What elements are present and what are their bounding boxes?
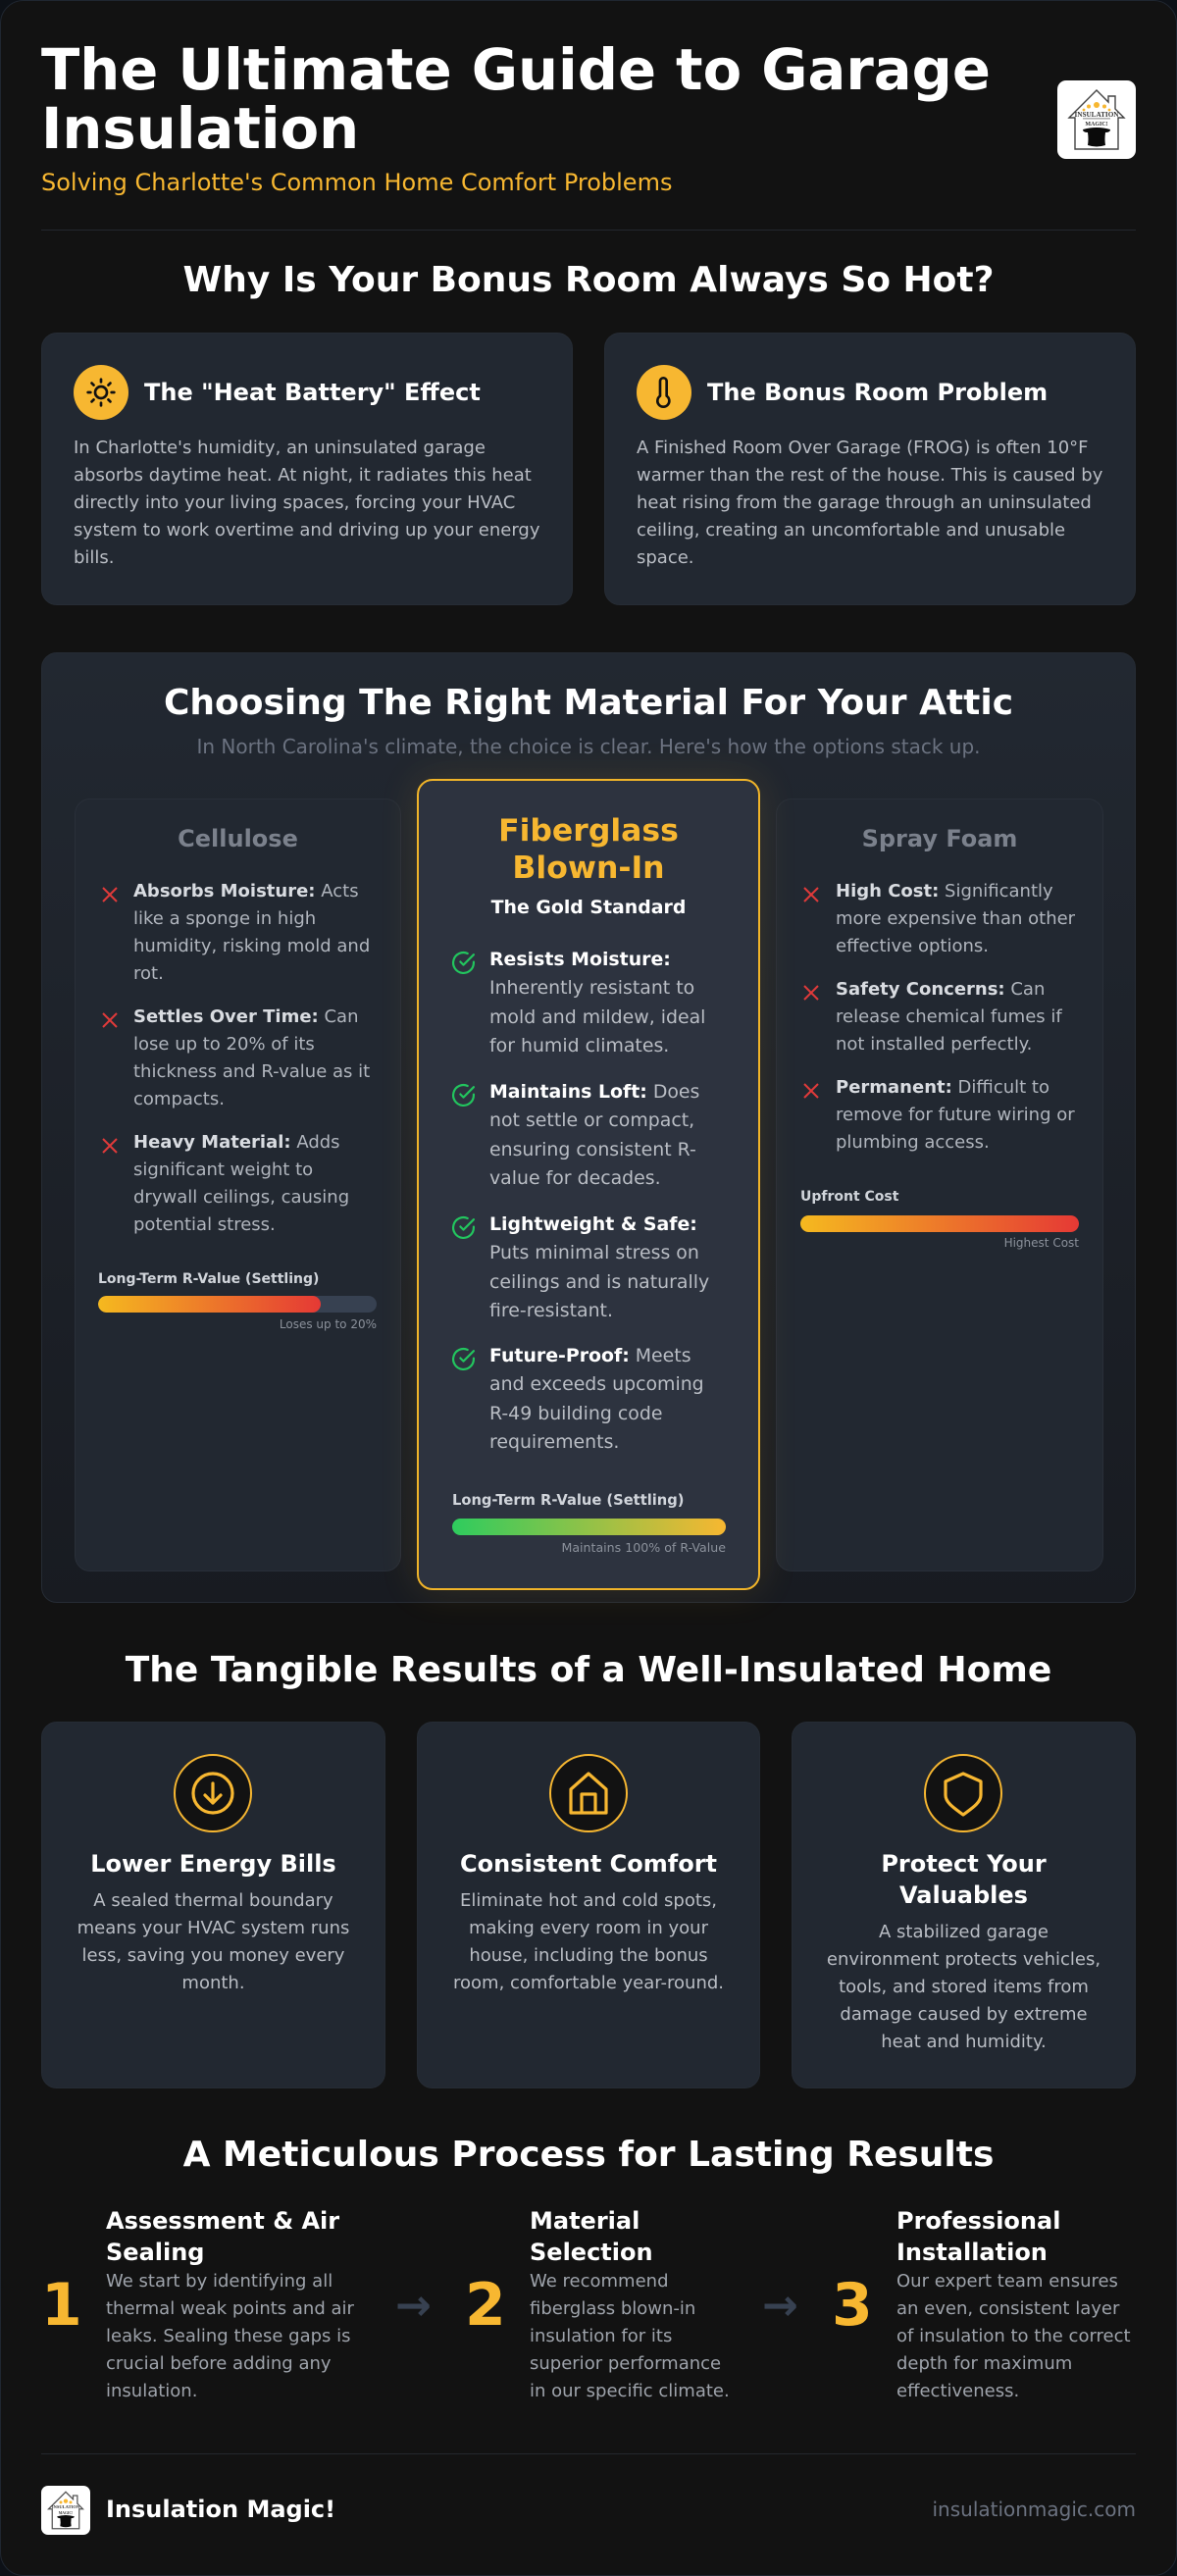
- item: safety concerns: not installed perfectly.: [836, 1034, 1032, 1055]
- materials subheading: In North Carolina's climate, the choice is clear. Here's how the options stack up.: [196, 735, 981, 758]
- card heading: [881, 1850, 1047, 1909]
- step text: insulation.: [106, 2381, 197, 2401]
- step title: Sealing: [106, 2239, 204, 2266]
- step number: 2: [465, 2271, 506, 2340]
- spray foam heading: Spray Foam: [862, 825, 1017, 852]
- r-value caption: Maintains 100% of R-Value: [561, 1540, 726, 1555]
- item: permanent: [836, 1077, 1075, 1153]
- card text: month.: [181, 1973, 245, 1993]
- item: absorbs moisture: like a sponge in high: [133, 908, 316, 929]
- item: future-proof: Future-Proof: Meets: [489, 1345, 691, 1366]
- item: safety concerns: [836, 979, 1063, 1055]
- item: lightweight and safe: [489, 1213, 709, 1321]
- item: heavy material: significant weight to: [133, 1159, 313, 1180]
- icon: x: [803, 887, 819, 902]
- card heading: Protect Your: [881, 1850, 1047, 1878]
- step text: crucial before adding any: [106, 2353, 332, 2374]
- card text: bills.: [74, 547, 115, 568]
- item: future-proof: and exceeds upcoming: [489, 1373, 704, 1395]
- upfront cost bar: [800, 1215, 1079, 1232]
- step number: 3: [832, 2271, 873, 2340]
- step title: Professional: [896, 2207, 1060, 2235]
- step text: an even, consistent layer: [896, 2298, 1119, 2319]
- card heading: The Bonus Room Problem: [707, 379, 1048, 406]
- step text: thermal weak points and air: [106, 2298, 354, 2319]
- card text: A stabilized garage: [879, 1922, 1049, 1942]
- item: settles over time: Settles Over Time: Can: [133, 1006, 358, 1027]
- step text: We start by identifying all: [106, 2271, 333, 2292]
- card text: damage caused by extreme: [840, 2004, 1088, 2025]
- step title: [896, 2207, 1060, 2266]
- item: resists moisture: mold and mildew, ideal: [489, 1006, 705, 1028]
- upfront cost caption: Highest Cost: [1004, 1236, 1079, 1250]
- card text: [827, 1922, 1100, 2052]
- card text: making every room in your: [469, 1918, 708, 1938]
- item: heavy material: drywall ceilings, causing: [133, 1187, 349, 1208]
- icon: arrow down circle: [174, 1754, 252, 1832]
- card text: environment protects vehicles,: [827, 1949, 1100, 1970]
- r-value bar: [98, 1296, 377, 1313]
- step text: [896, 2271, 1131, 2401]
- item: resists moisture: Inherently resistant to: [489, 977, 694, 999]
- column: cellulose: [75, 799, 401, 1571]
- item: maintains loft: [489, 1081, 699, 1189]
- card heading: Lower Energy Bills: [90, 1850, 336, 1878]
- item: heavy material: potential stress.: [133, 1214, 276, 1235]
- icon: home: [549, 1754, 628, 1832]
- step title: Assessment & Air: [106, 2207, 339, 2235]
- step number: 1: [41, 2271, 82, 2340]
- icon: check: [451, 952, 475, 974]
- icon: thermometer: [637, 365, 691, 420]
- upfront cost label: Upfront Cost: [800, 1189, 898, 1205]
- title: Insulation: [41, 96, 359, 162]
- footer logo: MAGIC!: [59, 2511, 73, 2515]
- column: fiberglass blown-in: [417, 779, 760, 1590]
- card text: means your HVAC system runs: [77, 1918, 349, 1938]
- step 3: [832, 2207, 1131, 2401]
- card text: heat and humidity.: [881, 2032, 1047, 2052]
- item: maintains loft: value for decades.: [489, 1167, 661, 1189]
- footer url: insulationmagic.com: [932, 2498, 1136, 2521]
- item: future-proof: requirements.: [489, 1431, 619, 1453]
- step text: We recommend: [530, 2271, 669, 2292]
- item: maintains loft: ensuring consistent R-: [489, 1139, 696, 1160]
- icon: x: [803, 1083, 819, 1099]
- item: resists moisture: for humid climates.: [489, 1035, 669, 1056]
- card text: house, including the bonus: [469, 1945, 708, 1966]
- step text: Our expert team ensures: [896, 2271, 1118, 2292]
- item: lightweight and safe: ceilings and is naturally: [489, 1271, 709, 1293]
- step text: superior performance: [530, 2353, 721, 2374]
- step text: [106, 2271, 354, 2401]
- step title: Installation: [896, 2239, 1048, 2266]
- panel: heat battery effect: [41, 333, 573, 605]
- step text: effectiveness.: [896, 2381, 1019, 2401]
- item: high cost: [836, 881, 1075, 956]
- icon: check: [451, 1216, 475, 1239]
- gold standard tag: The Gold Standard: [491, 897, 686, 918]
- r-value label: Long-Term R-Value (Settling): [452, 1492, 684, 1509]
- icon: x: [102, 1138, 118, 1154]
- footer logo: [41, 2486, 90, 2535]
- footer brand name: Insulation Magic!: [106, 2496, 335, 2523]
- footer logo: INSULATION: [52, 2504, 80, 2509]
- fiberglass heading: Fiberglass: [498, 813, 679, 849]
- fiberglass heading: Blown-In: [512, 850, 665, 886]
- card text: [453, 1890, 724, 1993]
- card text: warmer than the rest of the house. This is caused by: [637, 465, 1102, 486]
- item: high cost: effective options.: [836, 936, 989, 956]
- item: absorbs moisture: [133, 881, 370, 984]
- heading: process: A Meticulous Process for Lasting Results: [183, 2135, 994, 2175]
- panel: lower energy bills: [41, 1722, 385, 2088]
- item: absorbs moisture: rot.: [133, 963, 164, 984]
- card text: less, saving you money every: [82, 1945, 344, 1966]
- logo: insulation magic house: [1057, 80, 1136, 159]
- card text: tools, and stored items from: [839, 1977, 1089, 1997]
- card text: A sealed thermal boundary: [93, 1890, 333, 1911]
- arrow: →: [395, 2281, 432, 2331]
- panel: consistent comfort: [417, 1722, 760, 2088]
- item: resists moisture: Resists Moisture:: [489, 949, 671, 970]
- column: spray foam: [776, 799, 1103, 1571]
- panel: protect valuables: [792, 1722, 1136, 2088]
- card text: A Finished Room Over Garage (FROG) is often 10°F: [637, 438, 1089, 458]
- icon: sun: [74, 365, 128, 420]
- icon: x: [803, 985, 819, 1001]
- step text: leaks. Sealing these gaps is: [106, 2326, 351, 2346]
- item: maintains loft: Maintains Loft: Does: [489, 1081, 699, 1103]
- arrow: →: [762, 2281, 798, 2331]
- step 2: [465, 2207, 730, 2401]
- heading: why bonus room hot: Why Is Your Bonus Room Always So Hot?: [183, 260, 994, 300]
- materials heading: Choosing The Right Material For Your Attic: [164, 683, 1013, 723]
- item: lightweight and safe: Lightweight & Safe:: [489, 1213, 697, 1235]
- step text: depth for maximum: [896, 2353, 1072, 2374]
- step title: Material: [530, 2207, 640, 2235]
- item: settles over time: [133, 1006, 370, 1109]
- logo: insulation magic house: MAGIC!: [1085, 122, 1108, 128]
- icon: x: [102, 1012, 118, 1028]
- card heading: Consistent Comfort: [460, 1850, 717, 1878]
- step text: insulation for its: [530, 2326, 672, 2346]
- icon: check: [451, 1348, 475, 1370]
- step title: Selection: [530, 2239, 653, 2266]
- card text: In Charlotte's humidity, an uninsulated garage: [74, 438, 486, 458]
- item: safety concerns: Safety Concerns: Can: [836, 979, 1045, 1000]
- item: settles over time: lose up to 20% of its: [133, 1034, 315, 1055]
- item: settles over time: compacts.: [133, 1089, 225, 1109]
- card heading: The "Heat Battery" Effect: [144, 379, 481, 406]
- item: future-proof: [489, 1345, 704, 1453]
- step title: [530, 2207, 653, 2266]
- title: [41, 37, 991, 162]
- item: maintains loft: not settle or compact,: [489, 1109, 694, 1131]
- card text: directly into your living spaces, forcing your HVAC: [74, 492, 515, 513]
- step 1: [41, 2207, 354, 2401]
- subtitle: Solving Charlotte's Common Home Comfort Problems: [41, 169, 672, 196]
- card text: heat rising from the garage through an uninsulated: [637, 492, 1092, 513]
- card text: [77, 1890, 349, 1993]
- card text: [74, 438, 539, 568]
- card text: room, comfortable year-round.: [453, 1973, 724, 1993]
- panel: bonus room problem: [604, 333, 1136, 605]
- item: absorbs moisture: humidity, risking mold and: [133, 936, 370, 956]
- icon: shield: [924, 1754, 1002, 1832]
- item: high cost: more expensive than other: [836, 908, 1075, 929]
- item: permanent: plumbing access.: [836, 1132, 990, 1153]
- icon: x: [102, 887, 118, 902]
- step text: fiberglass blown-in: [530, 2298, 695, 2319]
- card heading: Valuables: [899, 1881, 1028, 1909]
- step title: [106, 2207, 339, 2266]
- card text: system to work overtime and driving up your energy: [74, 520, 539, 541]
- logo: insulation magic house: INSULATION: [1075, 111, 1119, 119]
- step text: [530, 2271, 730, 2401]
- card text: space.: [637, 547, 694, 568]
- item: resists moisture: [489, 949, 705, 1056]
- card text: [637, 438, 1102, 568]
- item: permanent: Permanent: Difficult to: [836, 1077, 1049, 1098]
- panel: materials comparison: [41, 652, 1136, 1603]
- item: safety concerns: release chemical fumes if: [836, 1006, 1062, 1027]
- item: lightweight and safe: Puts minimal stress on: [489, 1242, 699, 1263]
- card text: Eliminate hot and cold spots,: [460, 1890, 717, 1911]
- item: lightweight and safe: fire-resistant.: [489, 1300, 613, 1321]
- fiberglass heading: [498, 813, 679, 886]
- item: future-proof: R-49 building code: [489, 1403, 662, 1424]
- icon: check: [451, 1083, 475, 1107]
- step text: of insulation to the correct: [896, 2326, 1131, 2346]
- card text: ceiling, creating an uncomfortable and unusable: [637, 520, 1065, 541]
- step text: in our specific climate.: [530, 2381, 730, 2401]
- cellulose heading: Cellulose: [178, 825, 298, 852]
- title: The Ultimate Guide to Garage: [41, 37, 991, 103]
- heading: tangible results: The Tangible Results of a Well-Insulated Home: [126, 1650, 1051, 1690]
- card text: absorbs daytime heat. At night, it radiates this heat: [74, 465, 532, 486]
- item: high cost: High Cost: Significantly: [836, 881, 1053, 902]
- item: heavy material: [133, 1132, 349, 1235]
- item: heavy material: Heavy Material: Adds: [133, 1132, 340, 1153]
- r-value label: Long-Term R-Value (Settling): [98, 1271, 319, 1287]
- r-value bar: [452, 1519, 726, 1535]
- item: permanent: remove for future wiring or: [836, 1105, 1075, 1125]
- item: settles over time: thickness and R-value as it: [133, 1061, 370, 1082]
- item: absorbs moisture: Absorbs Moisture: Acts: [133, 881, 359, 902]
- r-value caption: Loses up to 20%: [280, 1317, 377, 1331]
